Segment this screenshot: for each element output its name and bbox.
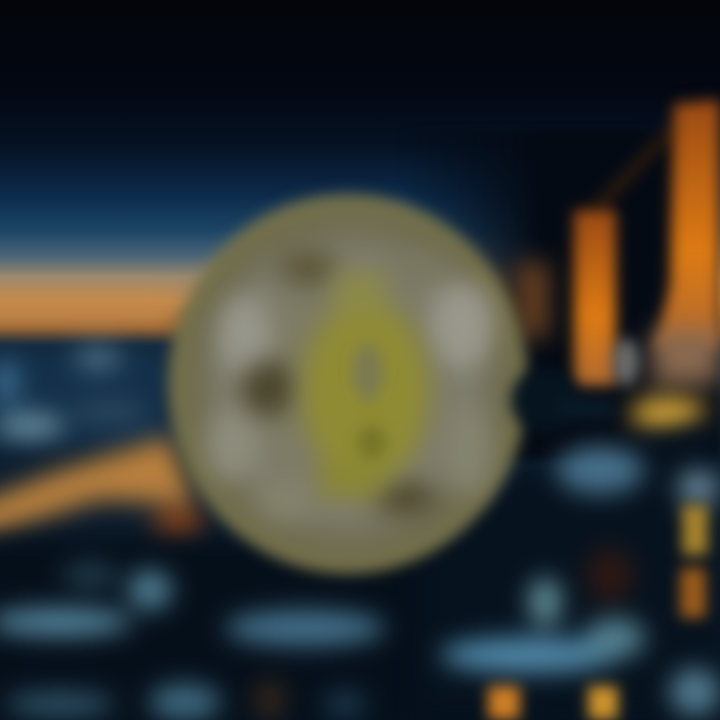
bitcoin symbol: [304, 272, 428, 498]
lower left and bottom city: [0, 538, 540, 720]
tower: dim left: [520, 262, 548, 338]
tower: right: [654, 100, 720, 350]
right side dark sky: [400, 130, 720, 460]
yellow glow below the towers: [630, 396, 706, 432]
orange lit windows, lower right: [488, 505, 708, 720]
right side lower city: [420, 420, 720, 720]
dark foreground object at the coin edge: [511, 368, 615, 432]
left glowing road: [0, 436, 204, 545]
background towers with orange glow: [520, 100, 720, 386]
coin disc: [168, 194, 528, 574]
orange horizon band on the left: [0, 298, 175, 324]
coin: [168, 194, 528, 574]
left city: blue lights: [0, 346, 170, 464]
tower base haze: [652, 330, 720, 385]
diagonal cable: [590, 122, 676, 215]
coin inner details: [206, 250, 494, 520]
tower: middle: [574, 210, 616, 386]
